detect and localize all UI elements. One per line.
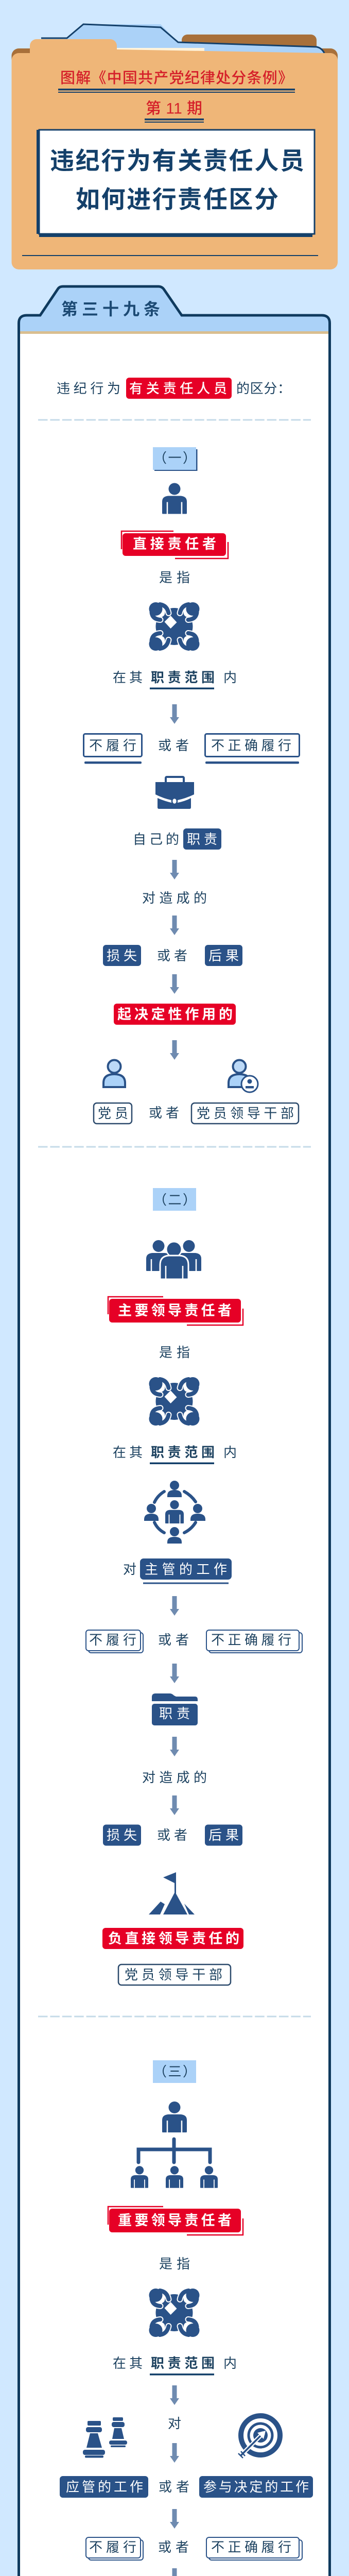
text: within duties: 在其 xyxy=(113,670,143,685)
arrow xyxy=(170,704,179,724)
options: work types: 参与决定的工作 xyxy=(203,2479,309,2495)
options: loss or consequence: 或者 xyxy=(157,1827,187,1843)
text: caused: 对造成的 xyxy=(142,1770,207,1785)
text: shi zhi: 是指 xyxy=(159,1345,190,1360)
text: shi zhi: 是指 xyxy=(159,570,190,585)
number badge one: （一） xyxy=(153,450,196,466)
tag: party leader: 党员领导干部 xyxy=(125,1967,222,1982)
options: fail to perform xyxy=(83,734,300,764)
options: loss or consequence xyxy=(103,945,242,966)
number badge two xyxy=(153,1188,196,1211)
text: within duties xyxy=(113,1445,237,1464)
text: within duties: 在其 xyxy=(113,1445,143,1460)
text: caused: 对造成的 xyxy=(142,890,207,906)
text: own duties xyxy=(133,828,221,850)
arrow xyxy=(170,2509,179,2529)
options: work types: 或者 xyxy=(159,2479,189,2495)
section three xyxy=(60,2060,313,2576)
arrow xyxy=(170,1795,179,1815)
icon: chess pieces xyxy=(83,2417,127,2458)
folder: duties xyxy=(152,1693,198,1725)
icon: briefcase xyxy=(155,777,194,809)
text: own duties: 自己的 xyxy=(133,832,179,847)
options: loss or consequence: 后果 xyxy=(208,948,239,963)
main title box: 违纪行为有关责任人员 xyxy=(50,147,304,174)
text: within duties: 内 xyxy=(223,2355,237,2371)
options: member or leader: 或者 xyxy=(149,1105,179,1121)
section two xyxy=(86,1188,302,1985)
number badge three: （三） xyxy=(153,2064,196,2079)
article heading: 第三十九条 xyxy=(61,300,160,318)
options: member or leader: 党员 xyxy=(98,1106,128,1121)
options: fail to perform xyxy=(86,1630,302,1653)
main title box: 如何进行责任区分 xyxy=(76,185,278,213)
options: fail to perform xyxy=(86,2537,302,2560)
number badge three xyxy=(153,2060,196,2083)
text: own duties: 职责 xyxy=(187,832,217,847)
icon: three people xyxy=(146,1240,201,1279)
label: direct responsible: 直接责任者 xyxy=(133,536,216,552)
arrow xyxy=(170,1596,179,1616)
text: within duties xyxy=(113,670,237,689)
intro line xyxy=(57,378,291,399)
text: dui: 对 xyxy=(168,2416,181,2431)
text: within duties: 职责范围 xyxy=(151,2355,215,2371)
text: within duties: 职责范围 xyxy=(151,670,215,685)
intro line: 违纪行为 xyxy=(57,381,120,396)
arrow xyxy=(170,1737,179,1756)
options: fail to perform: 不正确履行 xyxy=(211,738,291,753)
text: within duties xyxy=(113,2355,237,2375)
arrow xyxy=(170,916,179,935)
options: fail to perform: 不正确履行 xyxy=(211,2539,291,2555)
icon: target with arrow xyxy=(238,2416,280,2458)
main panel xyxy=(19,286,329,2576)
label: important leader: 重要领导责任者 xyxy=(118,2213,232,2228)
text: work in charge: 主管的工作 xyxy=(145,1562,227,1577)
options: fail to perform: 或者 xyxy=(158,738,189,753)
options: member or leader: 党员领导干部 xyxy=(197,1106,294,1121)
arrow xyxy=(170,2385,179,2405)
arrow xyxy=(170,1664,179,1683)
icon: meeting xyxy=(149,1377,200,1426)
icon: party member xyxy=(103,1060,125,1087)
text: work in charge: 对 xyxy=(123,1562,136,1577)
text: within duties: 内 xyxy=(223,1445,237,1460)
label: main leader: 主要领导责任者 xyxy=(118,1303,232,1318)
options: work types: 应管的工作 xyxy=(66,2479,143,2495)
intro line: 有关责任人员 xyxy=(129,381,227,396)
arrow xyxy=(170,974,179,994)
number badge one xyxy=(153,447,198,471)
options: loss or consequence: 后果 xyxy=(208,1827,239,1843)
icon: meeting xyxy=(149,602,200,651)
series title: 图解《中国共产党纪律处分条例》 xyxy=(60,70,293,87)
intro line: 的区分： xyxy=(236,381,291,396)
options: work types xyxy=(60,2476,313,2498)
label: direct leadership xyxy=(102,1928,243,1949)
icon: party leader xyxy=(229,1060,258,1092)
text: shi zhi: 是指 xyxy=(159,2256,190,2272)
icon: meeting xyxy=(149,2289,200,2337)
label: important leader xyxy=(108,2207,243,2235)
arrow xyxy=(170,2568,179,2576)
issue number: 第 11 期 xyxy=(146,100,202,117)
icon: person xyxy=(162,483,187,514)
label: decisive role: 起决定性作用的 xyxy=(117,1007,233,1022)
icon: people network xyxy=(144,1481,205,1544)
arrow xyxy=(170,2443,179,2463)
section one xyxy=(83,447,300,1124)
options: fail to perform: 不履行 xyxy=(89,738,136,753)
options: fail to perform: 不正确履行 xyxy=(211,1632,291,1648)
label: main leader xyxy=(108,1297,243,1325)
options: fail to perform: 或者 xyxy=(158,1632,189,1648)
options: loss or consequence: 损失 xyxy=(107,948,137,963)
number badge two: （二） xyxy=(153,1192,196,1208)
icon: flag on mountain xyxy=(149,1872,195,1914)
options: fail to perform: 不履行 xyxy=(89,2539,136,2555)
options: loss or consequence: 或者 xyxy=(157,948,187,963)
label: direct responsible xyxy=(121,531,228,558)
options: fail to perform: 不履行 xyxy=(89,1632,136,1648)
arrow xyxy=(170,1040,179,1060)
icon: org tree xyxy=(131,2102,218,2188)
tag: party leader xyxy=(118,1964,231,1985)
label: direct leadership: 负直接领导责任的 xyxy=(108,1931,239,1946)
text: within duties: 在其 xyxy=(113,2355,143,2371)
text: within duties: 职责范围 xyxy=(151,1445,215,1460)
text: work in charge xyxy=(123,1558,232,1584)
main title box xyxy=(37,130,315,237)
text: within duties: 内 xyxy=(223,670,237,685)
options: fail to perform: 或者 xyxy=(158,2539,189,2555)
label: decisive role xyxy=(114,1004,236,1025)
header folder xyxy=(11,24,338,269)
options: loss or consequence: 损失 xyxy=(107,1827,137,1843)
options: loss or consequence xyxy=(103,1825,242,1845)
options: member or leader xyxy=(94,1103,299,1124)
folder: duties: 职责 xyxy=(159,1706,190,1721)
arrow xyxy=(170,860,179,879)
